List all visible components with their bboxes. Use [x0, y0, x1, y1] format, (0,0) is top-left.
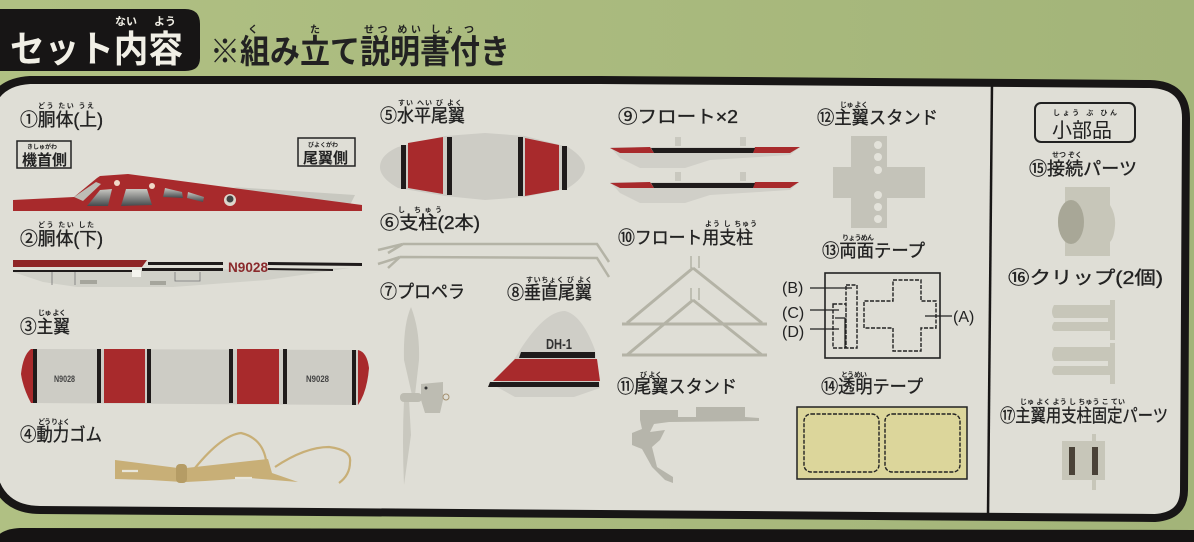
part 4: rubber band: ④動力ゴム [20, 425, 102, 445]
part 10: float struts [618, 219, 767, 355]
part 1: upper fuselage: びよくがわ [308, 141, 338, 149]
part 7: propeller: ⑦プロペラ [380, 282, 465, 302]
part 13: double-sided tape: (A) [953, 309, 974, 326]
part 15: connector: ⑮接続パーツ [1029, 159, 1137, 179]
part 1: upper fuselage: ①胴体(上) [20, 110, 103, 130]
part 4: rubber band: どう りょく [38, 417, 70, 426]
part 6: struts [378, 205, 609, 277]
part 15: connector: せつ ぞく [1052, 151, 1082, 159]
header: set contents [0, 9, 200, 71]
part 16: clips [1008, 268, 1163, 384]
part 11: tail stand: び よく [640, 370, 662, 379]
part 8: vertical tail: すいちょく び よく [526, 275, 592, 284]
part 8: vertical tail: ⑧垂直尾翼 [507, 283, 592, 303]
part 2: lower fuselage: N9028 [228, 259, 268, 275]
header: set contents: セット内容 [10, 29, 183, 70]
part 6: struts: し ちゅう [398, 205, 442, 214]
part 5: horizontal stabilizer: すい へい び よく [398, 98, 462, 107]
part 10: float struts: よう し ちゅう [705, 219, 757, 228]
part 2: lower fuselage [13, 220, 362, 287]
part 3: main wing: じゅ よく [38, 309, 66, 317]
subtitle: includes assembly instructions: せつ めい しょ つ [364, 24, 474, 36]
part 15: connector [1029, 151, 1137, 256]
part 16: clips: ⑯クリップ(2個) [1008, 268, 1163, 288]
part 11: tail stand [617, 370, 759, 483]
part 2: lower fuselage: どう たい した [38, 220, 94, 229]
part 13: double-sided tape: りょうめん [842, 233, 874, 242]
part 1: upper fuselage: 機首側 [22, 151, 67, 169]
part 12: wing stand [817, 101, 938, 228]
small parts heading: 小部品 [1052, 119, 1112, 142]
small parts heading [1035, 103, 1135, 142]
part 1: upper fuselage: きしゅがわ [27, 143, 57, 151]
part 3: main wing: ③主翼 [20, 317, 70, 337]
part 2: lower fuselage: ②胴体(下) [20, 229, 103, 249]
part 8: vertical tail: DH-1 [546, 336, 572, 353]
part 1: upper fuselage: 尾翼側 [303, 150, 348, 167]
part 13: double-sided tape: ⑬両面テープ [822, 241, 925, 261]
subtitle: includes assembly instructions: く [248, 24, 258, 36]
small parts heading: しょう ぶ ひん [1053, 108, 1117, 117]
part 1: upper fuselage [13, 101, 362, 211]
part 12: wing stand: じゅ よく [840, 101, 868, 109]
part 6: struts: ⑥支柱(2本) [380, 213, 480, 233]
part 17: wing strut fixing part: ⑰主翼用支柱固定パーツ [1000, 406, 1168, 426]
part 9: floats: ⑨フロート×2 [618, 107, 738, 127]
part 11: tail stand: ⑪尾翼スタンド [617, 377, 737, 397]
header: set contents: ない [115, 15, 137, 28]
header: set contents: よう [154, 15, 176, 28]
part 1: upper fuselage: どう たい うえ [38, 101, 94, 110]
part 9: floats [610, 107, 800, 203]
part 17: wing strut fixing part [1000, 397, 1168, 490]
part 8: vertical tail [488, 275, 600, 397]
part 12: wing stand: ⑫主翼スタンド [817, 108, 938, 128]
subtitle: includes assembly instructions: た [310, 24, 320, 36]
bottom black panel edge [0, 528, 1194, 542]
part 14: clear tape: ⑭透明テープ [821, 377, 923, 397]
part 3: main wing [20, 309, 369, 405]
part 4: rubber band [20, 417, 350, 483]
part 17: wing strut fixing part: じゅ よく よう し ちゅう こ てい [1020, 397, 1125, 406]
part 13: double-sided tape: (D) [782, 324, 804, 341]
part 7: propeller [380, 282, 465, 485]
part 3: main wing: N9028 [54, 374, 75, 384]
subtitle: includes assembly instructions: ※組み立て説明書付き [210, 33, 510, 70]
part 14: clear tape [797, 370, 967, 479]
part 3: main wing: N9028 [306, 374, 329, 384]
part 13: double-sided tape [782, 233, 974, 358]
part 13: double-sided tape: (B) [782, 280, 803, 297]
part 5: horizontal stabilizer: ⑤水平尾翼 [380, 106, 465, 126]
part 10: float struts: ⑩フロート用支柱 [618, 228, 753, 248]
part 5: horizontal stabilizer [380, 98, 585, 200]
part 13: double-sided tape: (C) [782, 305, 804, 322]
part 14: clear tape: とう めい [841, 370, 867, 379]
